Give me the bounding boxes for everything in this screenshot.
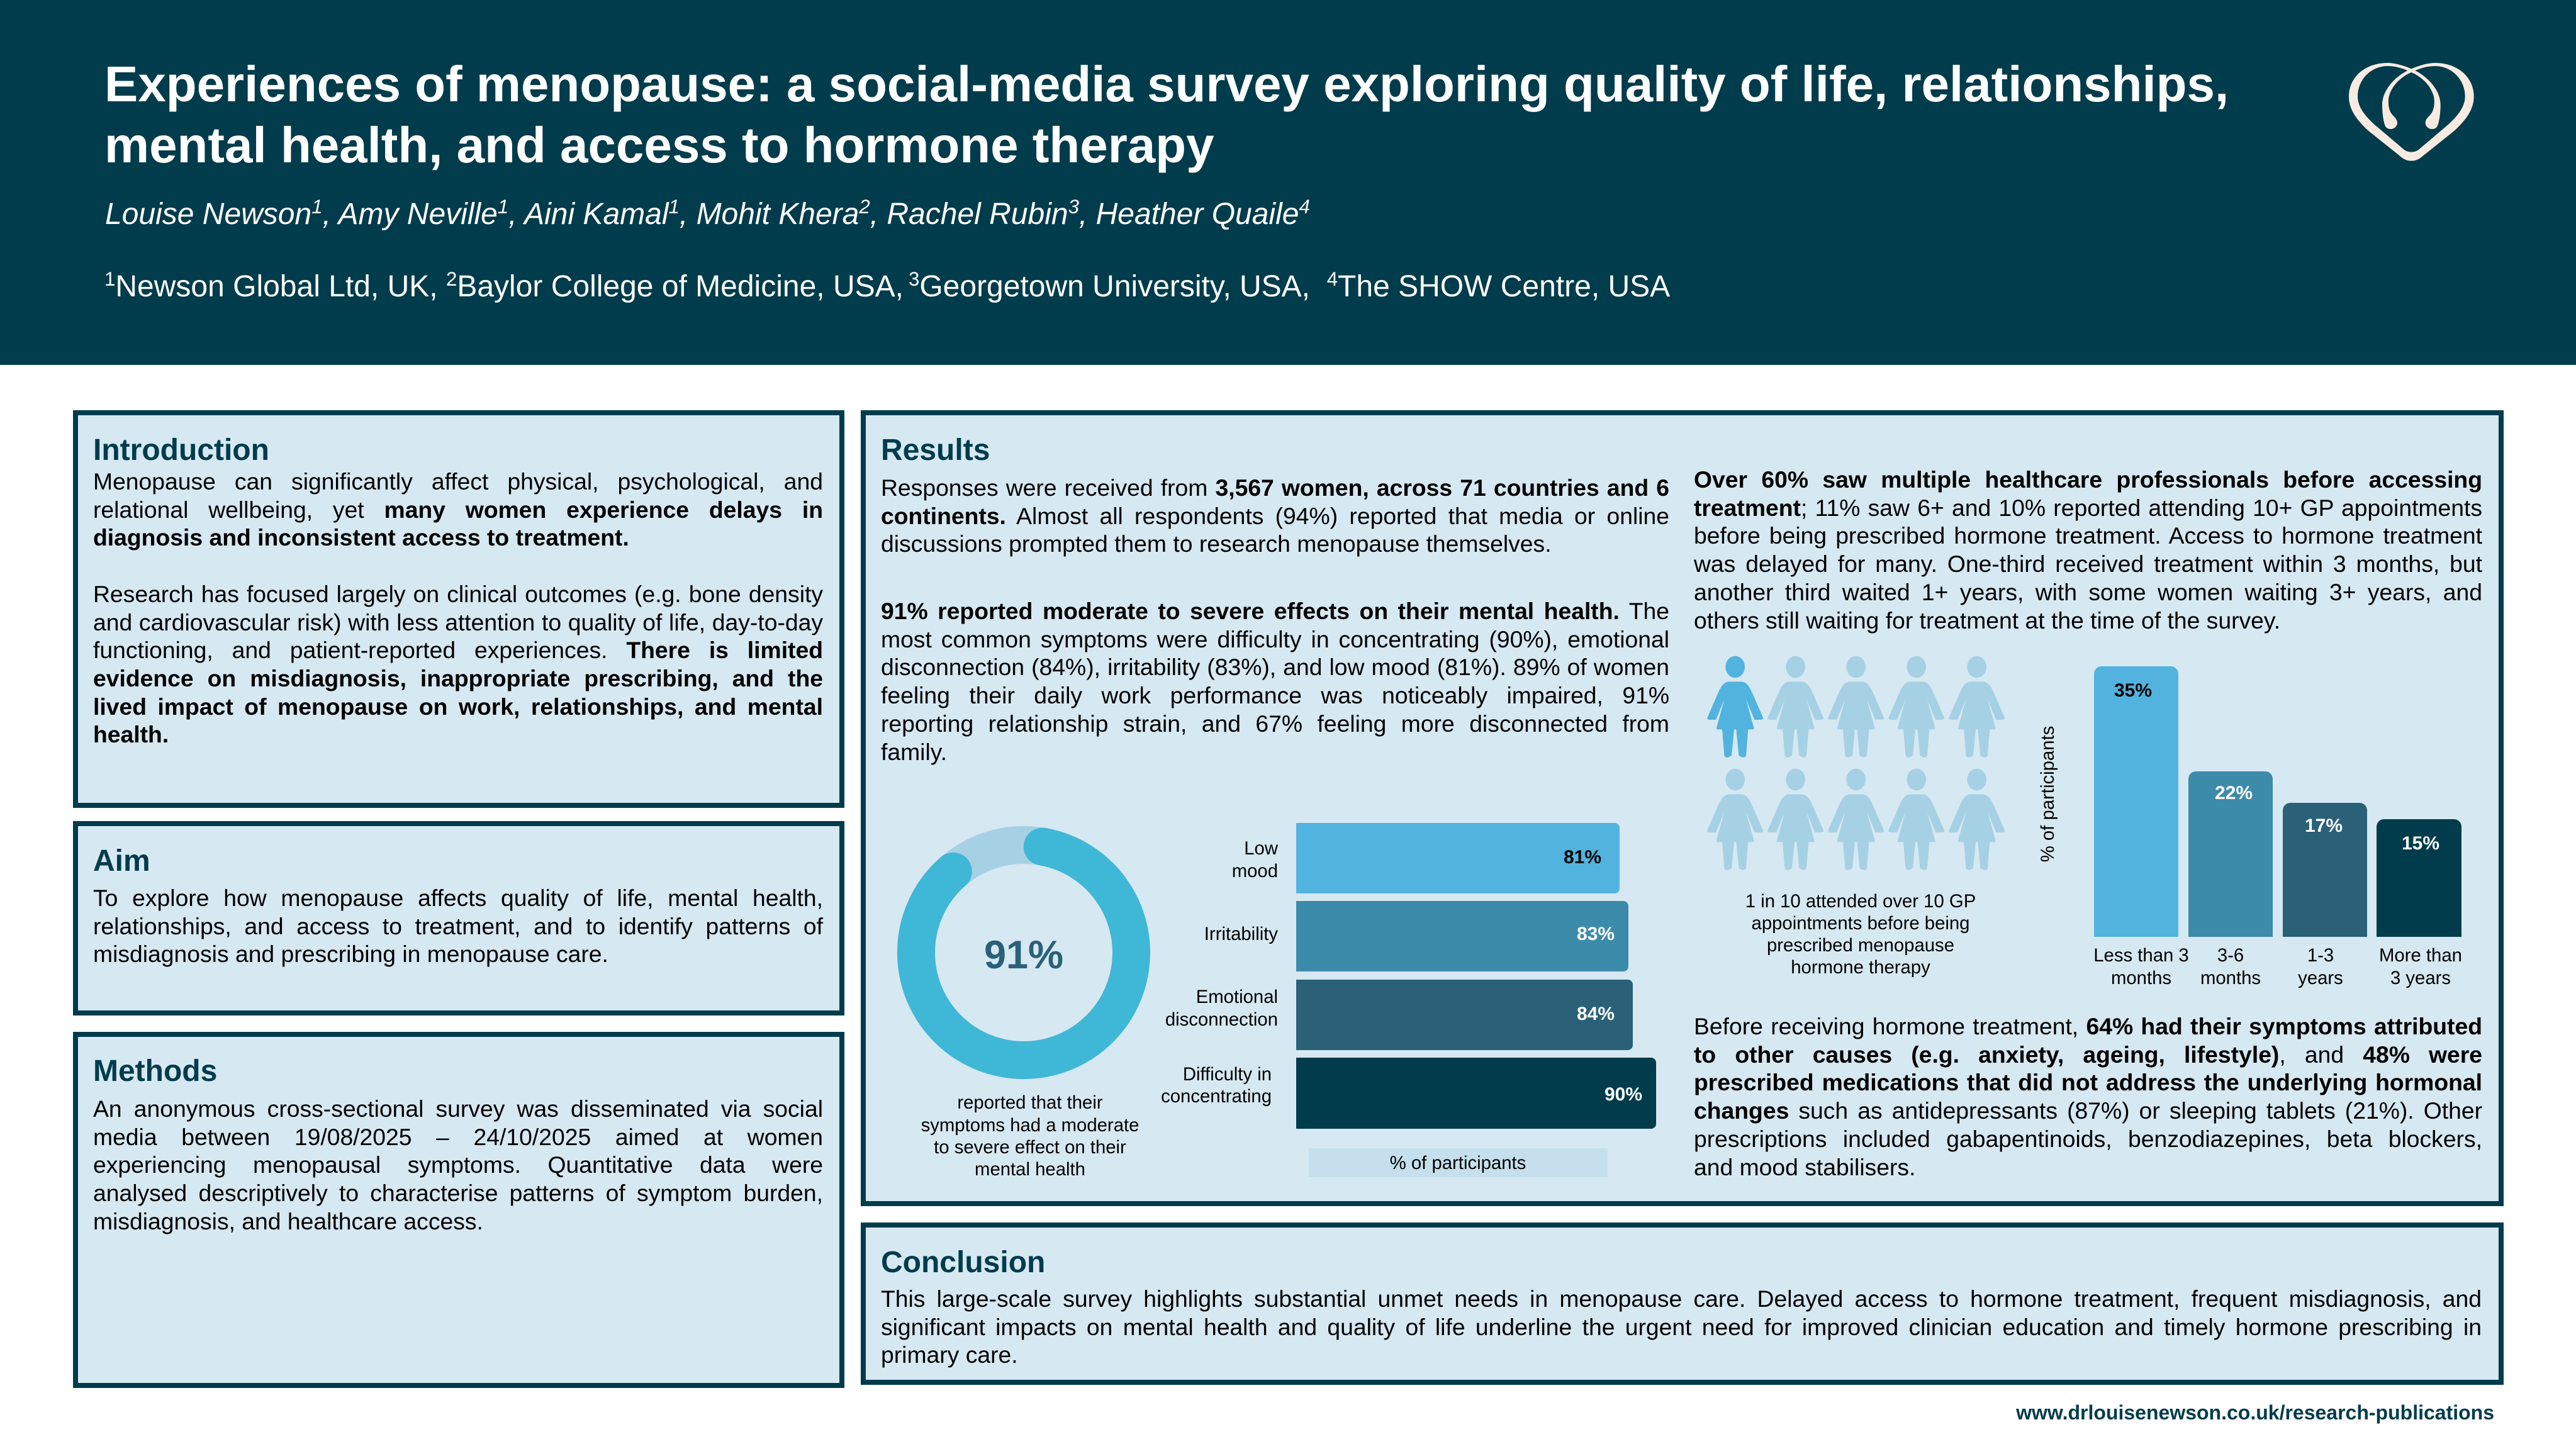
pictogram: 1 in 10 women [1707, 656, 2005, 870]
column: 1-3 years 17%: 1-3 [2307, 945, 2334, 966]
footer link: www.drlouisenewson.co.uk/research-publications [2016, 1401, 2494, 1424]
title [104, 56, 2229, 172]
bar: difficulty in concentrating 90%: 90% [1604, 1084, 1642, 1105]
text: results paragraph 4: Before receiving hormone treatment, 64% had their symptoms attributed [1694, 1013, 2482, 1039]
donut caption [921, 1092, 1139, 1180]
column: more than 3 years 15%: 3 years [2390, 968, 2451, 988]
column: more than 3 years 15%: 15% [2402, 833, 2439, 854]
title: mental health, and access to hormone therapy [104, 117, 1214, 172]
bar: irritability 83%: 83% [1577, 924, 1615, 944]
column: 3-6 months 22%: months [2200, 968, 2261, 988]
column: 1-3 years 17% [2283, 803, 2367, 988]
text: introduction body: health. [93, 721, 169, 747]
text: conclusion body [881, 1285, 2482, 1368]
bar: irritability 83% [1204, 901, 1628, 971]
icon: heart logo [2349, 63, 2474, 161]
panel: methods [73, 1032, 844, 1388]
text: results paragraph 2: disconnection (84%), irritability (83%), and low mood (81%). 89% of women [881, 654, 1669, 680]
bar: emotional disconnection 84%: 84% [1577, 1004, 1615, 1024]
text: results paragraph 3: Over 60% saw multiple healthcare professionals before accessing [1694, 466, 2482, 493]
text: results paragraph 3: another third waited 1+ years, with some women waiting 3+ years, and [1694, 579, 2482, 605]
text: aim body: relationships, and access to treatment, and to identify patterns of [93, 913, 823, 939]
heading: results: Results [881, 434, 990, 467]
authors: Louise Newson1, Amy Neville1, Aini Kamal1, Mohit Khera2, Rachel Rubin3, Heather Quaile4 [105, 196, 1310, 231]
column: 3-6 months 22%: 3-6 [2217, 945, 2244, 966]
pictogram caption: prescribed menopause [1767, 935, 1954, 956]
text: results paragraph 2: reporting relationship strain, and 67% feeling more disconnected from [881, 710, 1669, 737]
text: introduction body: lived impact of menopause on work, relationships, and mental [93, 693, 823, 720]
column: 1-3 years 17%: years [2298, 968, 2343, 988]
text: aim body: misdiagnosis and prescribing in menopause care. [93, 941, 608, 967]
text: results paragraph 1: discussions prompted them to research menopause themselves. [881, 530, 1552, 557]
text: results paragraph 3: others still waiting for treatment at the time of the survey. [1694, 607, 2280, 634]
affiliations: 1Newson Global Ltd, UK, 2Baylor College of Medicine, USA, 3Georgetown University, USA, 4The SHOW Centre, USA [104, 268, 1670, 303]
text: results paragraph 2 [881, 598, 1669, 765]
pictogram caption: appointments before being [1752, 913, 1969, 934]
title: Experiences of menopause: a social-media survey exploring quality of life, relationships, [104, 56, 2229, 112]
text: results paragraph 4 [1694, 1013, 2482, 1180]
text: conclusion body: significant impacts on mental health and quality of life underline the urgent need for improved clinician education and timely hormone prescribing in [881, 1314, 2482, 1340]
text: methods body: An anonymous cross-sectional survey was disseminated via social [93, 1095, 823, 1122]
header banner [0, 0, 2576, 365]
text: introduction body [93, 468, 823, 747]
text: results paragraph 1: Responses were received from 3,567 women, across 71 countries and 6 [881, 474, 1669, 501]
column: 3-6 months 22% [2188, 771, 2273, 988]
text: results paragraph 3: treatment; 11% saw 6+ and 10% reported attending 10+ GP appointments [1694, 495, 2482, 521]
panel: results [861, 410, 2504, 1206]
text: results paragraph 4: to other causes (e.g. anxiety, ageing, lifestyle), and 48% were [1694, 1041, 2482, 1068]
text: results paragraph 3: before being prescribed hormone treatment. Access to hormone treatment [1694, 522, 2482, 549]
axis label: % of participants: % of participants [1390, 1153, 1526, 1173]
text: results paragraph 4: prescriptions included gabapentinoids, benzodiazepines, beta blockers, [1694, 1126, 2482, 1152]
heading: methods: Methods [93, 1055, 217, 1088]
text: results paragraph 4: and mood stabilisers. [1694, 1154, 1915, 1180]
text: introduction body: functioning, and patient-reported experiences. There is limited [93, 637, 823, 663]
pictogram caption [1745, 891, 1976, 978]
text: introduction body: evidence on misdiagnosis, inappropriate prescribing, and the [93, 665, 823, 691]
bar: emotional disconnection 84% [1165, 980, 1633, 1050]
text: results paragraph 2: family. [881, 739, 947, 765]
column: more than 3 years 15% [2377, 819, 2462, 988]
donut chart: 91%: 91% [984, 933, 1063, 977]
pictogram caption: hormone therapy [1791, 957, 1930, 978]
bar: emotional disconnection 84%: Emotional [1196, 987, 1278, 1007]
text: aim body [93, 885, 823, 967]
bar: difficulty in concentrating 90%: concentrating [1161, 1086, 1272, 1107]
column: 3-6 months 22%: 22% [2215, 783, 2253, 803]
panel: conclusion [861, 1222, 2504, 1385]
text: introduction body: and cardiovascular risk) with less attention to quality of life, day-to-day [93, 609, 823, 635]
text: methods body: analysed descriptively to characterise patterns of symptom burden, [93, 1180, 823, 1206]
pictogram caption: 1 in 10 attended over 10 GP [1745, 891, 1976, 912]
donut caption: to severe effect on their [934, 1137, 1126, 1158]
bar: low mood 81%: mood [1232, 861, 1278, 881]
text: introduction body: Research has focused largely on clinical outcomes (e.g. bone density [93, 581, 823, 607]
text: introduction body: Menopause can significantly affect physical, psychological, and [93, 468, 823, 495]
bar: low mood 81% [1232, 823, 1620, 893]
text: introduction body: relational wellbeing, yet many women experience delays in [93, 496, 823, 523]
panel: aim [73, 821, 844, 1015]
column: less than 3 months 35%: Less than 3 [2093, 945, 2189, 966]
text: methods body: media between 19/08/2025 – 24/10/2025 aimed at women [93, 1124, 823, 1150]
text: methods body: experiencing menopausal symptoms. Quantitative data were [93, 1151, 823, 1178]
text: results paragraph 2: most common symptoms were difficulty in concentrating (90%), emotional [881, 626, 1669, 652]
text: results paragraph 1 [881, 474, 1669, 557]
column: less than 3 months 35% [2093, 666, 2189, 988]
bar: low mood 81%: Low [1244, 838, 1279, 859]
column: more than 3 years 15%: More than [2379, 945, 2462, 966]
bar: irritability 83%: Irritability [1204, 924, 1278, 944]
bar: difficulty in concentrating 90%: Difficulty in [1183, 1064, 1272, 1085]
donut chart: 91% [916, 845, 1131, 1060]
column: less than 3 months 35%: 35% [2114, 680, 2152, 701]
heading: introduction: Introduction [93, 434, 269, 467]
text: introduction body: diagnosis and inconsistent access to treatment. [93, 524, 629, 551]
text: conclusion body: primary care. [881, 1341, 1018, 1368]
bar: low mood 81%: 81% [1564, 847, 1601, 868]
column: less than 3 months 35%: months [2111, 968, 2171, 988]
panel: introduction [73, 410, 844, 808]
column: 1-3 years 17%: 17% [2305, 815, 2343, 836]
donut caption: mental health [975, 1159, 1085, 1180]
text: results paragraph 3: was delayed for many. One-third received treatment within 3 months, but [1694, 551, 2482, 577]
text: results paragraph 4: prescribed medications that did not address the underlying hormonal [1694, 1069, 2482, 1095]
text: results paragraph 2: feeling their daily work performance was noticeably impaired, 91% [881, 682, 1669, 708]
heading: conclusion: Conclusion [881, 1246, 1045, 1279]
column chart: time to treatment [2093, 666, 2462, 988]
axis label: % of participants (vertical): % of participants [2037, 726, 2058, 862]
bar: emotional disconnection 84%: disconnection [1165, 1009, 1278, 1030]
bar: difficulty in concentrating 90% [1161, 1058, 1656, 1129]
donut caption: reported that their [957, 1092, 1103, 1113]
text: conclusion body: This large-scale survey highlights substantial unmet needs in menopause care. Delayed access to hormone treatment, frequent misdiagnosis, and [881, 1285, 2482, 1312]
text: aim body: To explore how menopause affects quality of life, mental health, [93, 885, 823, 911]
text: methods body [93, 1095, 823, 1234]
axis label: % of participants [1309, 1148, 1608, 1177]
heading: aim: Aim [93, 844, 150, 878]
bar chart: symptoms [1161, 823, 1656, 1177]
text: methods body: misdiagnosis, and healthcare access. [93, 1208, 483, 1234]
text: results paragraph 4: changes such as antidepressants (87%) or sleeping tablets (21%). Other [1694, 1097, 2482, 1124]
text: results paragraph 1: continents. Almost all respondents (94%) reported that media or online [881, 503, 1669, 529]
text: results paragraph 2: 91% reported moderate to severe effects on their mental health. The [881, 598, 1669, 624]
text: results paragraph 3 [1694, 466, 2482, 634]
donut caption: symptoms had a moderate [921, 1115, 1139, 1136]
